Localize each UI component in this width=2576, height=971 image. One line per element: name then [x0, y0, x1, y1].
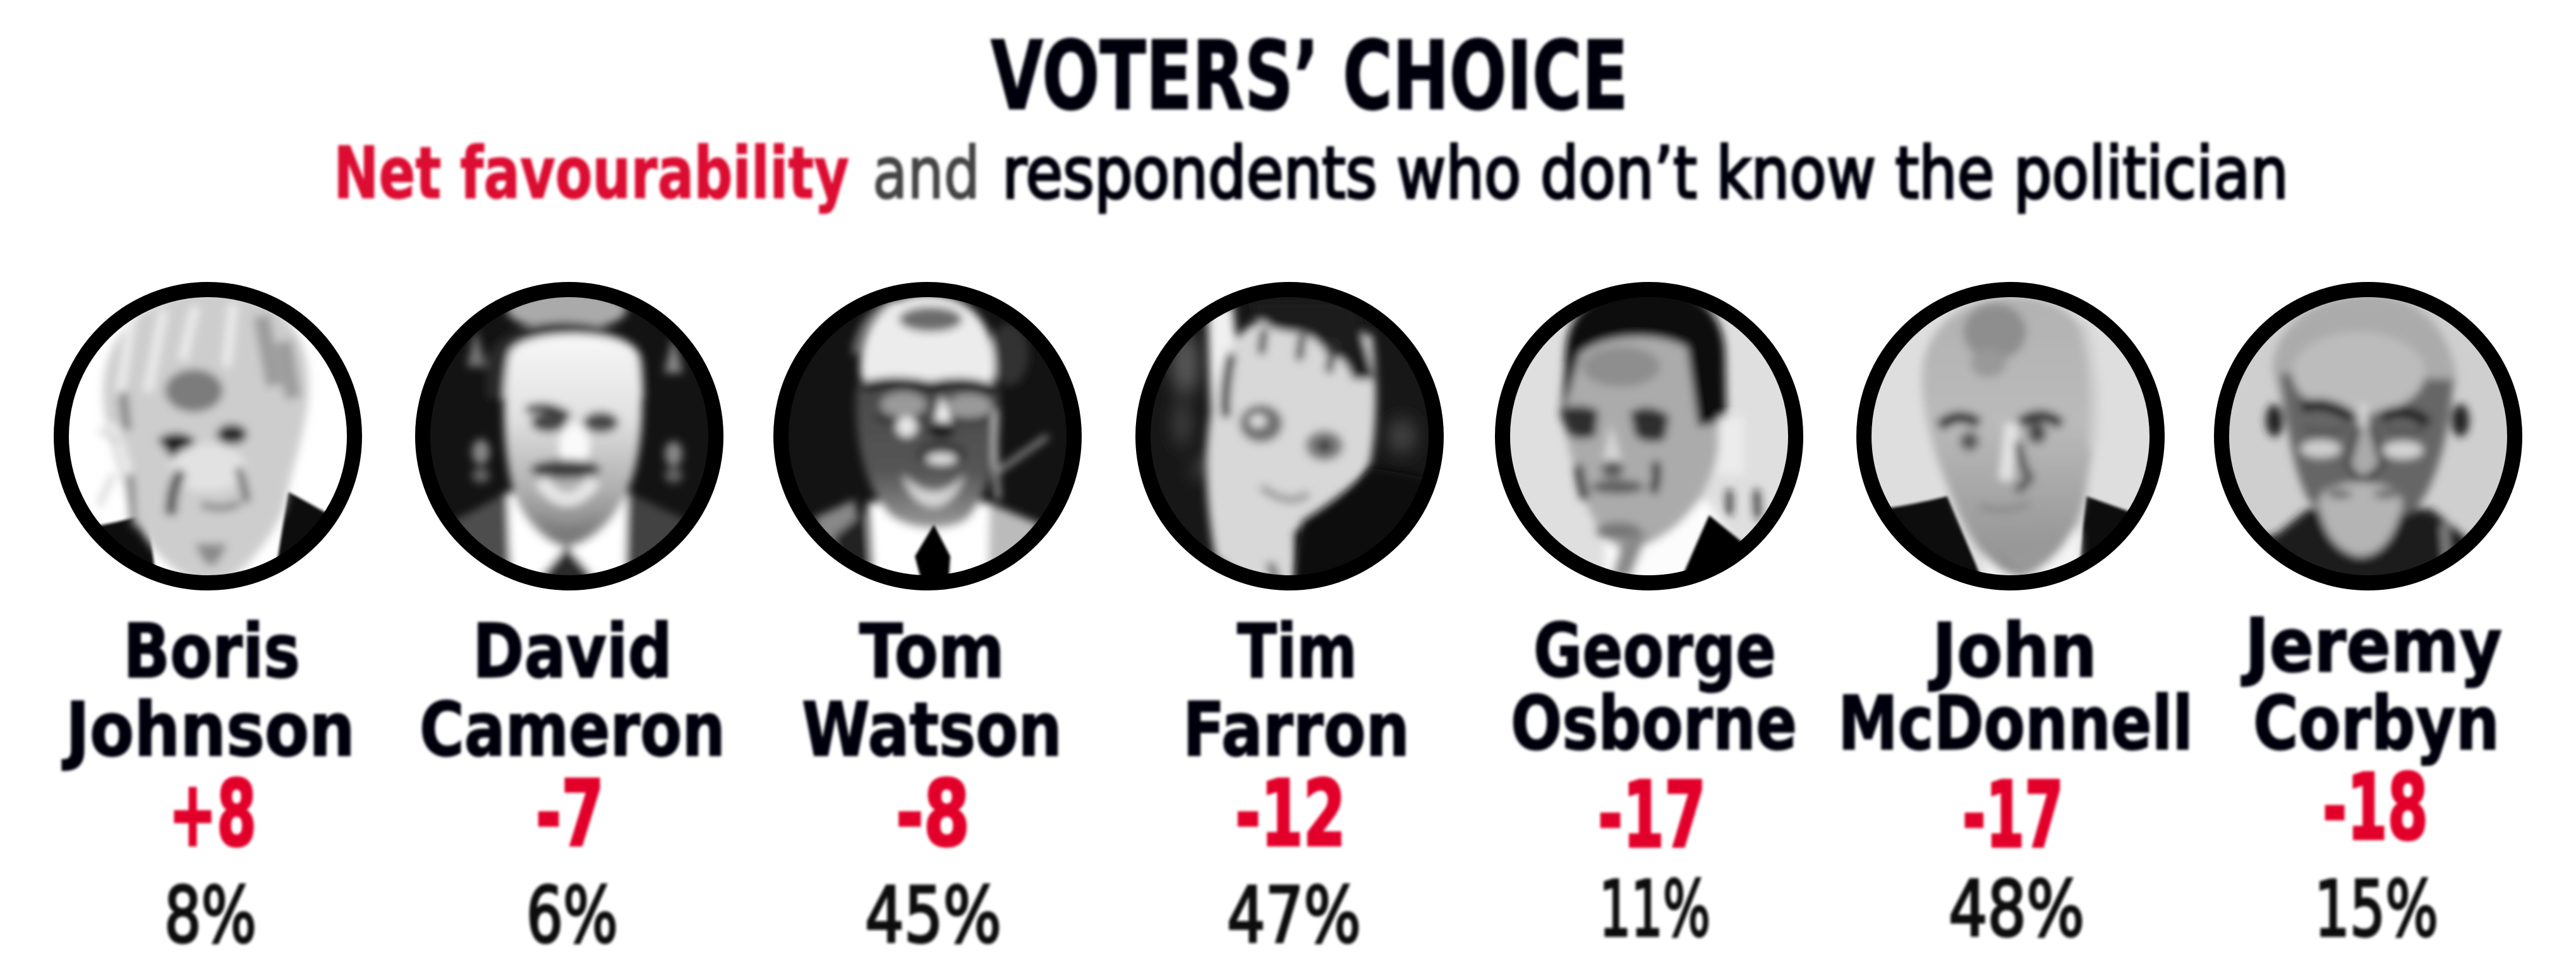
don't know share: 48%: 48%: [1949, 865, 2084, 954]
name: Boris Johnson: Boris: [123, 608, 300, 695]
name: Tim Farron: Farron: [1183, 686, 1410, 773]
portrait: Boris Johnson: [50, 278, 366, 594]
subtitle: respondents who don’t know the politician: [1002, 131, 2289, 215]
name: Jeremy Corbyn: [2241, 602, 2502, 767]
don't know share: 8%: 8%: [164, 871, 257, 960]
net favourability: -17: -17: [1598, 762, 1706, 868]
don't know share: 6%: 6%: [526, 871, 618, 960]
net favourability: -17: -17: [1962, 762, 2064, 868]
portrait: Tim Farron: [1132, 278, 1448, 594]
name: David Cameron: David: [473, 608, 672, 695]
name: George Osborne: George: [1533, 607, 1776, 694]
net favourability: +8: +8: [169, 760, 257, 867]
net favourability: -18: -18: [2323, 754, 2428, 860]
column: Tim Farron: [1132, 278, 1448, 960]
don't know share: 11%: 11%: [1599, 865, 1710, 954]
column: John McDonnell: [1838, 278, 2193, 954]
portrait: George Osborne: [1491, 278, 1807, 594]
name: George Osborne: [1511, 607, 1797, 767]
column: Jeremy Corbyn: [2210, 278, 2526, 954]
net favourability: -12: -12: [1235, 760, 1346, 867]
name: Boris Johnson: Johnson: [62, 686, 355, 773]
name: Boris Johnson: [62, 608, 355, 773]
column: George Osborne: [1491, 278, 1807, 954]
name: David Cameron: Cameron: [420, 686, 725, 773]
name: John McDonnell: John: [1928, 607, 2097, 694]
name: George Osborne: Osborne: [1511, 680, 1797, 767]
name: John McDonnell: McDonnell: [1838, 680, 2193, 767]
name: Tom Watson: Watson: [802, 686, 1062, 773]
name: Jeremy Corbyn: Jeremy: [2241, 602, 2502, 689]
name: Jeremy Corbyn: Corbyn: [2253, 680, 2500, 767]
portrait: John McDonnell: [1853, 278, 2168, 594]
column: David Cameron: [411, 278, 727, 960]
subtitle: Net favourability: [334, 131, 849, 215]
name: Tom Watson: Tom: [859, 608, 1005, 695]
name: John McDonnell: [1838, 607, 2193, 767]
net favourability: -8: -8: [896, 760, 970, 867]
don't know share: 47%: 47%: [1227, 871, 1361, 960]
portrait: Jeremy Corbyn: [2210, 278, 2526, 594]
subtitle: and: [873, 131, 980, 215]
don't know share: 45%: 45%: [865, 871, 1001, 960]
name: Tim Farron: Tim: [1237, 608, 1357, 695]
net favourability: -7: -7: [536, 760, 604, 867]
name: David Cameron: [420, 608, 725, 773]
column: Boris Johnson: [50, 278, 366, 960]
portrait: Tom Watson: [770, 278, 1085, 594]
column: Tom Watson: [770, 278, 1085, 960]
name: Tom Watson: [802, 608, 1062, 773]
subtitle: [334, 131, 2289, 215]
name: Tim Farron: [1183, 608, 1410, 773]
don't know share: 15%: 15%: [2314, 865, 2438, 954]
title: VOTERS’ CHOICE: [991, 21, 1628, 131]
portrait: David Cameron: [411, 278, 727, 594]
